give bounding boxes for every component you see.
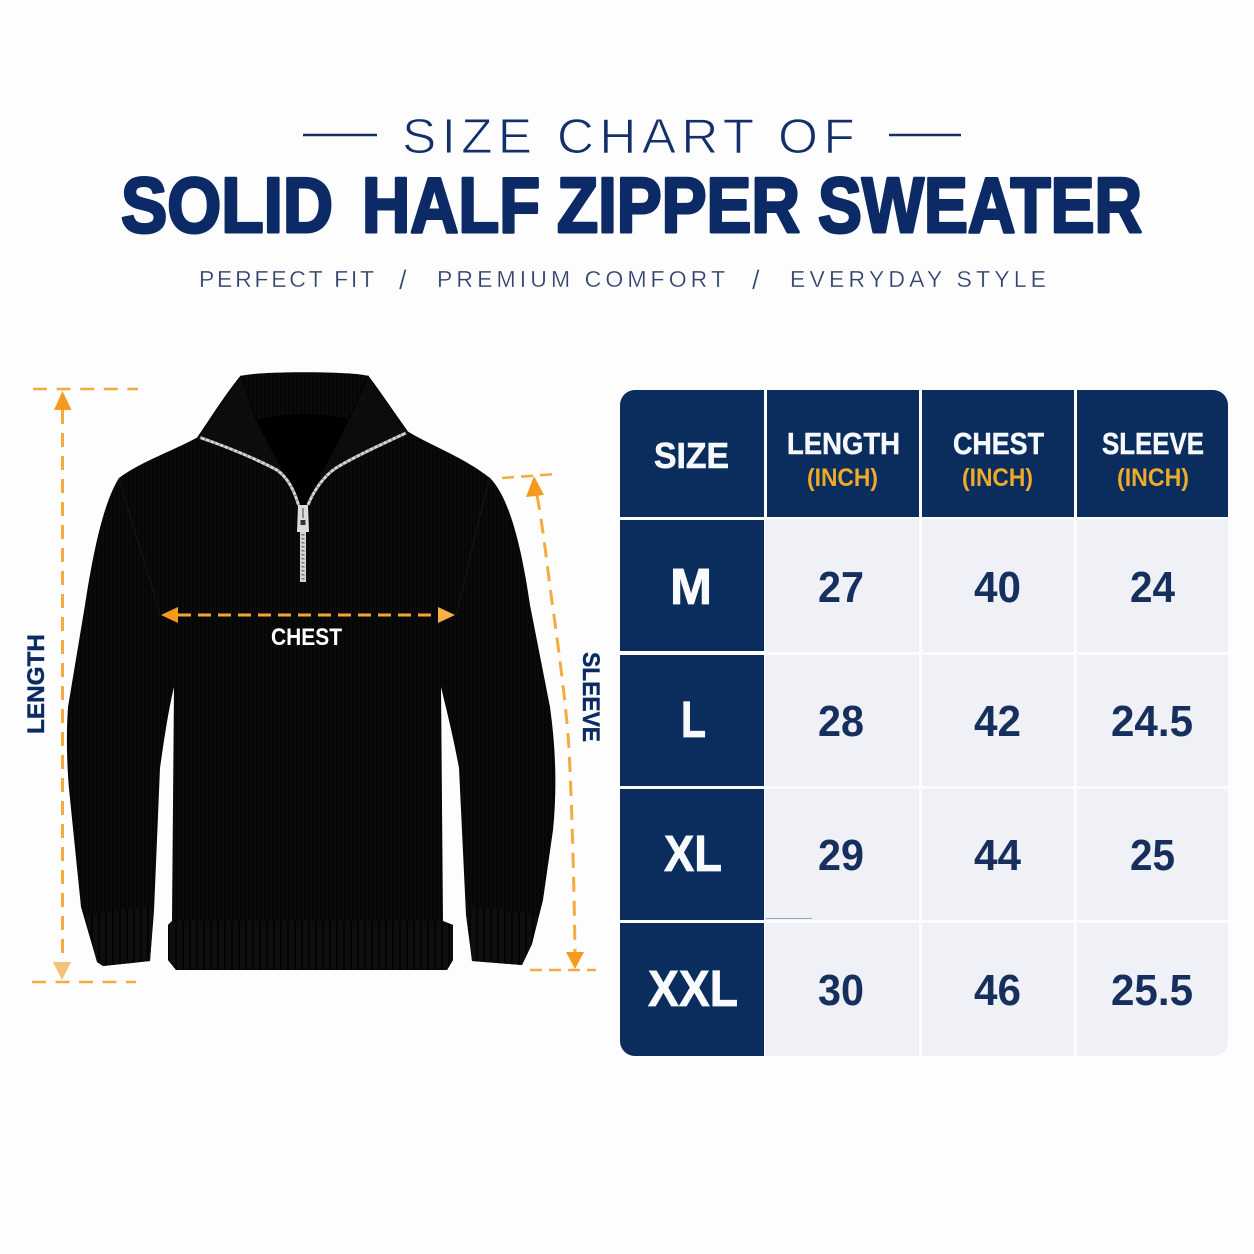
row xxl values: [818, 966, 1193, 1015]
neck opening: [257, 414, 348, 505]
cuffs: [85, 905, 538, 966]
zipper pull: [297, 505, 309, 532]
table header: LENGTH: [787, 426, 900, 461]
tagline: PREMIUM COMFORT: [437, 266, 725, 292]
title: solid half zipper sweater: SWEATER: [818, 161, 1142, 249]
table header: SIZE: [654, 435, 729, 476]
sweater illustration: [67, 372, 555, 970]
size labels: L: [681, 691, 706, 748]
sweater body: [67, 372, 555, 970]
label: sleeve: SLEEVE: [577, 652, 604, 742]
title: solid half zipper sweater: SOLID: [121, 161, 333, 249]
measurement: sleeve: [502, 474, 604, 970]
label: length: LENGTH: [23, 634, 50, 734]
table header: SLEEVE: [1102, 426, 1204, 461]
row xl values: 44: [974, 831, 1021, 880]
title: solid half zipper sweater: [121, 161, 1142, 249]
collar: [198, 376, 407, 505]
title: solid half zipper sweater: HALF: [362, 161, 540, 249]
row m values: 40: [974, 563, 1021, 612]
size labels: [648, 558, 738, 1017]
title: solid half zipper sweater: ZIPPER: [557, 161, 800, 249]
table header: (INCH): [807, 464, 878, 492]
row l values: 28: [818, 697, 864, 746]
row xxl values: 30: [818, 966, 864, 1015]
title line: size chart of: SIZE CHART OF: [402, 110, 860, 164]
row xxl values: 46: [974, 966, 1021, 1015]
row m values: 27: [818, 563, 864, 612]
table header: CHEST: [953, 426, 1044, 461]
row m values: [818, 563, 1175, 612]
size labels: M: [670, 558, 712, 615]
sleeve seams: [119, 478, 490, 615]
tagline: [199, 265, 1046, 295]
tagline: PERFECT FIT: [199, 266, 374, 292]
header: [121, 110, 1142, 295]
row l values: 24.5: [1111, 697, 1193, 746]
tagline: /: [752, 265, 760, 295]
size table: [620, 390, 1228, 1056]
row xl values: 25: [1130, 831, 1175, 880]
row l values: 42: [974, 697, 1021, 746]
size labels: XL: [664, 825, 722, 882]
row xxl values: 25.5: [1111, 966, 1193, 1015]
tagline: /: [399, 265, 407, 295]
zipper: [200, 433, 406, 582]
size labels: XXL: [648, 960, 738, 1017]
measurement: length: [23, 389, 138, 982]
row xl values: [818, 831, 1175, 880]
table header: (INCH): [1117, 464, 1189, 492]
measurement: chest: [161, 607, 455, 651]
row l values: [818, 697, 1193, 746]
label: chest: CHEST: [271, 624, 342, 651]
table header: [654, 426, 1204, 492]
tagline: EVERYDAY STYLE: [790, 266, 1046, 292]
hem ribbing: [168, 921, 453, 970]
table cell backgrounds: [620, 390, 1228, 1056]
row xl values: 29: [818, 831, 864, 880]
table header: (INCH): [962, 464, 1033, 492]
row m values: 24: [1130, 563, 1175, 612]
